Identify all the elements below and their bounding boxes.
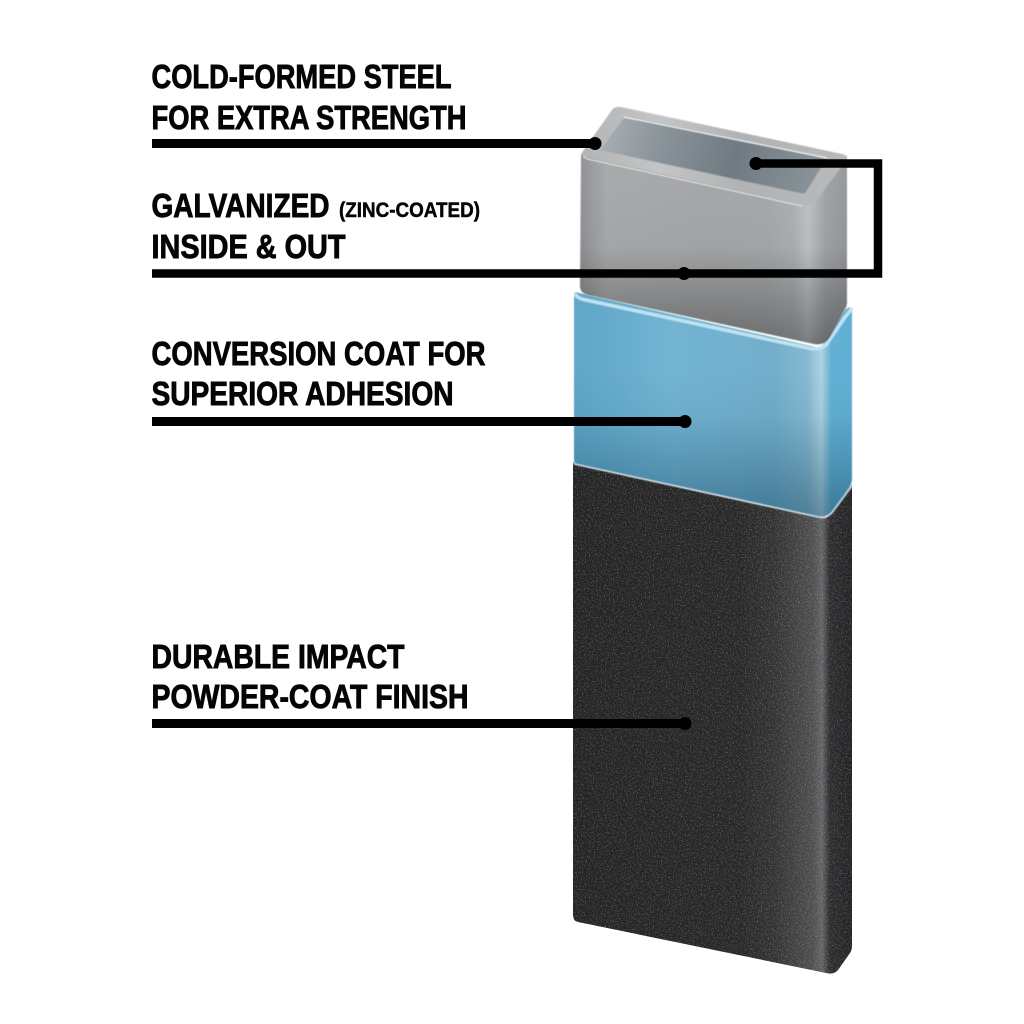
leader line: conversion coat	[152, 415, 692, 428]
heading: cold-formed steel: COLD-FORMED STEEL	[152, 59, 452, 96]
heading: powder coat: DURABLE IMPACT	[152, 639, 405, 676]
callout: conversion coat	[152, 336, 692, 428]
heading: powder coat: POWDER-COAT FINISH	[152, 679, 468, 716]
tube illustration	[573, 107, 852, 974]
heading: galvanized	[152, 188, 480, 266]
steel interior	[600, 117, 827, 193]
heading: conversion coat: CONVERSION COAT FOR	[152, 336, 486, 373]
callout: powder coat	[152, 639, 692, 730]
heading: galvanized: (ZINC-COATED)	[339, 198, 480, 222]
leader line: cold-formed steel	[152, 137, 602, 150]
conversion coat layer	[574, 292, 852, 517]
leader line: galvanized	[152, 157, 878, 280]
heading: conversion coat	[152, 336, 486, 413]
callout: cold-formed steel	[152, 59, 602, 150]
steel rim	[582, 107, 847, 206]
heading: conversion coat: SUPERIOR ADHESION	[152, 376, 454, 413]
steel outer body	[580, 153, 847, 344]
heading: galvanized: GALVANIZED	[152, 188, 330, 225]
heading: galvanized: INSIDE & OUT	[152, 229, 346, 266]
galvanized steel layer	[580, 107, 847, 344]
callout: galvanized	[152, 157, 878, 280]
leader line: powder coat	[152, 717, 692, 730]
heading: powder coat	[152, 639, 468, 716]
heading: cold-formed steel	[152, 59, 466, 137]
powder-coat layer	[573, 463, 852, 974]
heading: cold-formed steel: FOR EXTRA STRENGTH	[152, 100, 466, 137]
